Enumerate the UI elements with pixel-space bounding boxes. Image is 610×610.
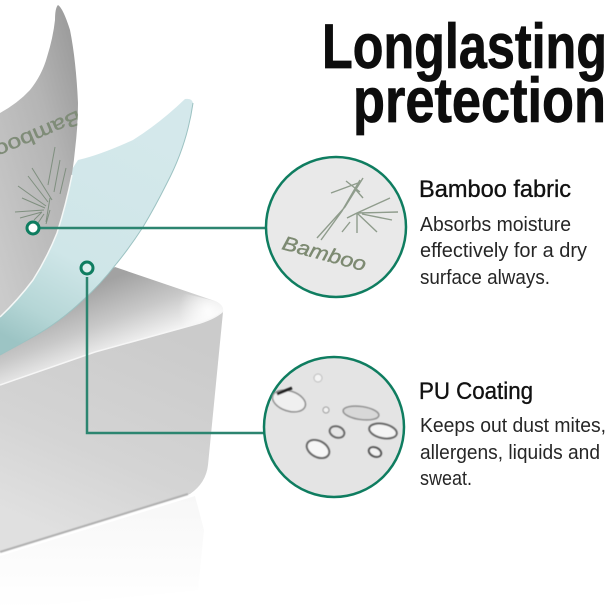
fabric bamboo print icon	[15, 147, 66, 226]
description: bamboo fabric: Absorbs moisture	[420, 214, 571, 236]
marker: PU coating	[81, 262, 93, 274]
description: PU coating: sweat.	[420, 468, 472, 490]
mattress front side	[0, 312, 223, 552]
swatch Bamboo lettering: Bamboo	[280, 233, 368, 276]
description: PU coating: Keeps out dust mites,	[420, 415, 606, 437]
mattress corner highlight	[150, 285, 223, 337]
grey fabric shape	[0, 5, 78, 317]
teal layer edge	[0, 103, 193, 355]
description: bamboo fabric: surface always.	[420, 267, 550, 289]
connector: bamboo fabric line	[40, 227, 265, 229]
description: bamboo fabric: effectively for a dry	[420, 240, 587, 262]
text block: bamboo fabric	[419, 176, 587, 289]
swatch disc	[264, 357, 404, 497]
mattress illustration	[0, 267, 223, 610]
fabric white edge	[0, 175, 72, 317]
heading: PU coating: PU Coating	[419, 378, 533, 405]
icon: bamboo stalks	[317, 178, 398, 240]
description: PU coating	[420, 415, 606, 490]
description: PU coating: allergens, liquids and	[420, 442, 600, 464]
description: bamboo fabric	[420, 214, 587, 289]
circle: PU coating swatch	[264, 357, 404, 497]
bamboo fabric layer	[0, 5, 85, 317]
mattress top surface	[0, 267, 223, 385]
connector: PU coating line	[87, 277, 264, 433]
title	[322, 12, 607, 136]
icon: water droplets	[270, 374, 398, 462]
marker: bamboo fabric	[27, 222, 39, 234]
circle: bamboo fabric swatch	[266, 157, 406, 297]
text block: PU coating	[419, 378, 606, 490]
swatch disc	[266, 157, 406, 297]
fabric Bamboo print: Bamboo	[0, 105, 85, 162]
heading: bamboo fabric: Bamboo fabric	[419, 176, 571, 203]
mattress floor reflection	[0, 496, 204, 610]
mattress top edge highlight	[0, 311, 223, 385]
teal PU coating layer	[0, 99, 193, 355]
mattress bottom edge	[0, 494, 188, 552]
